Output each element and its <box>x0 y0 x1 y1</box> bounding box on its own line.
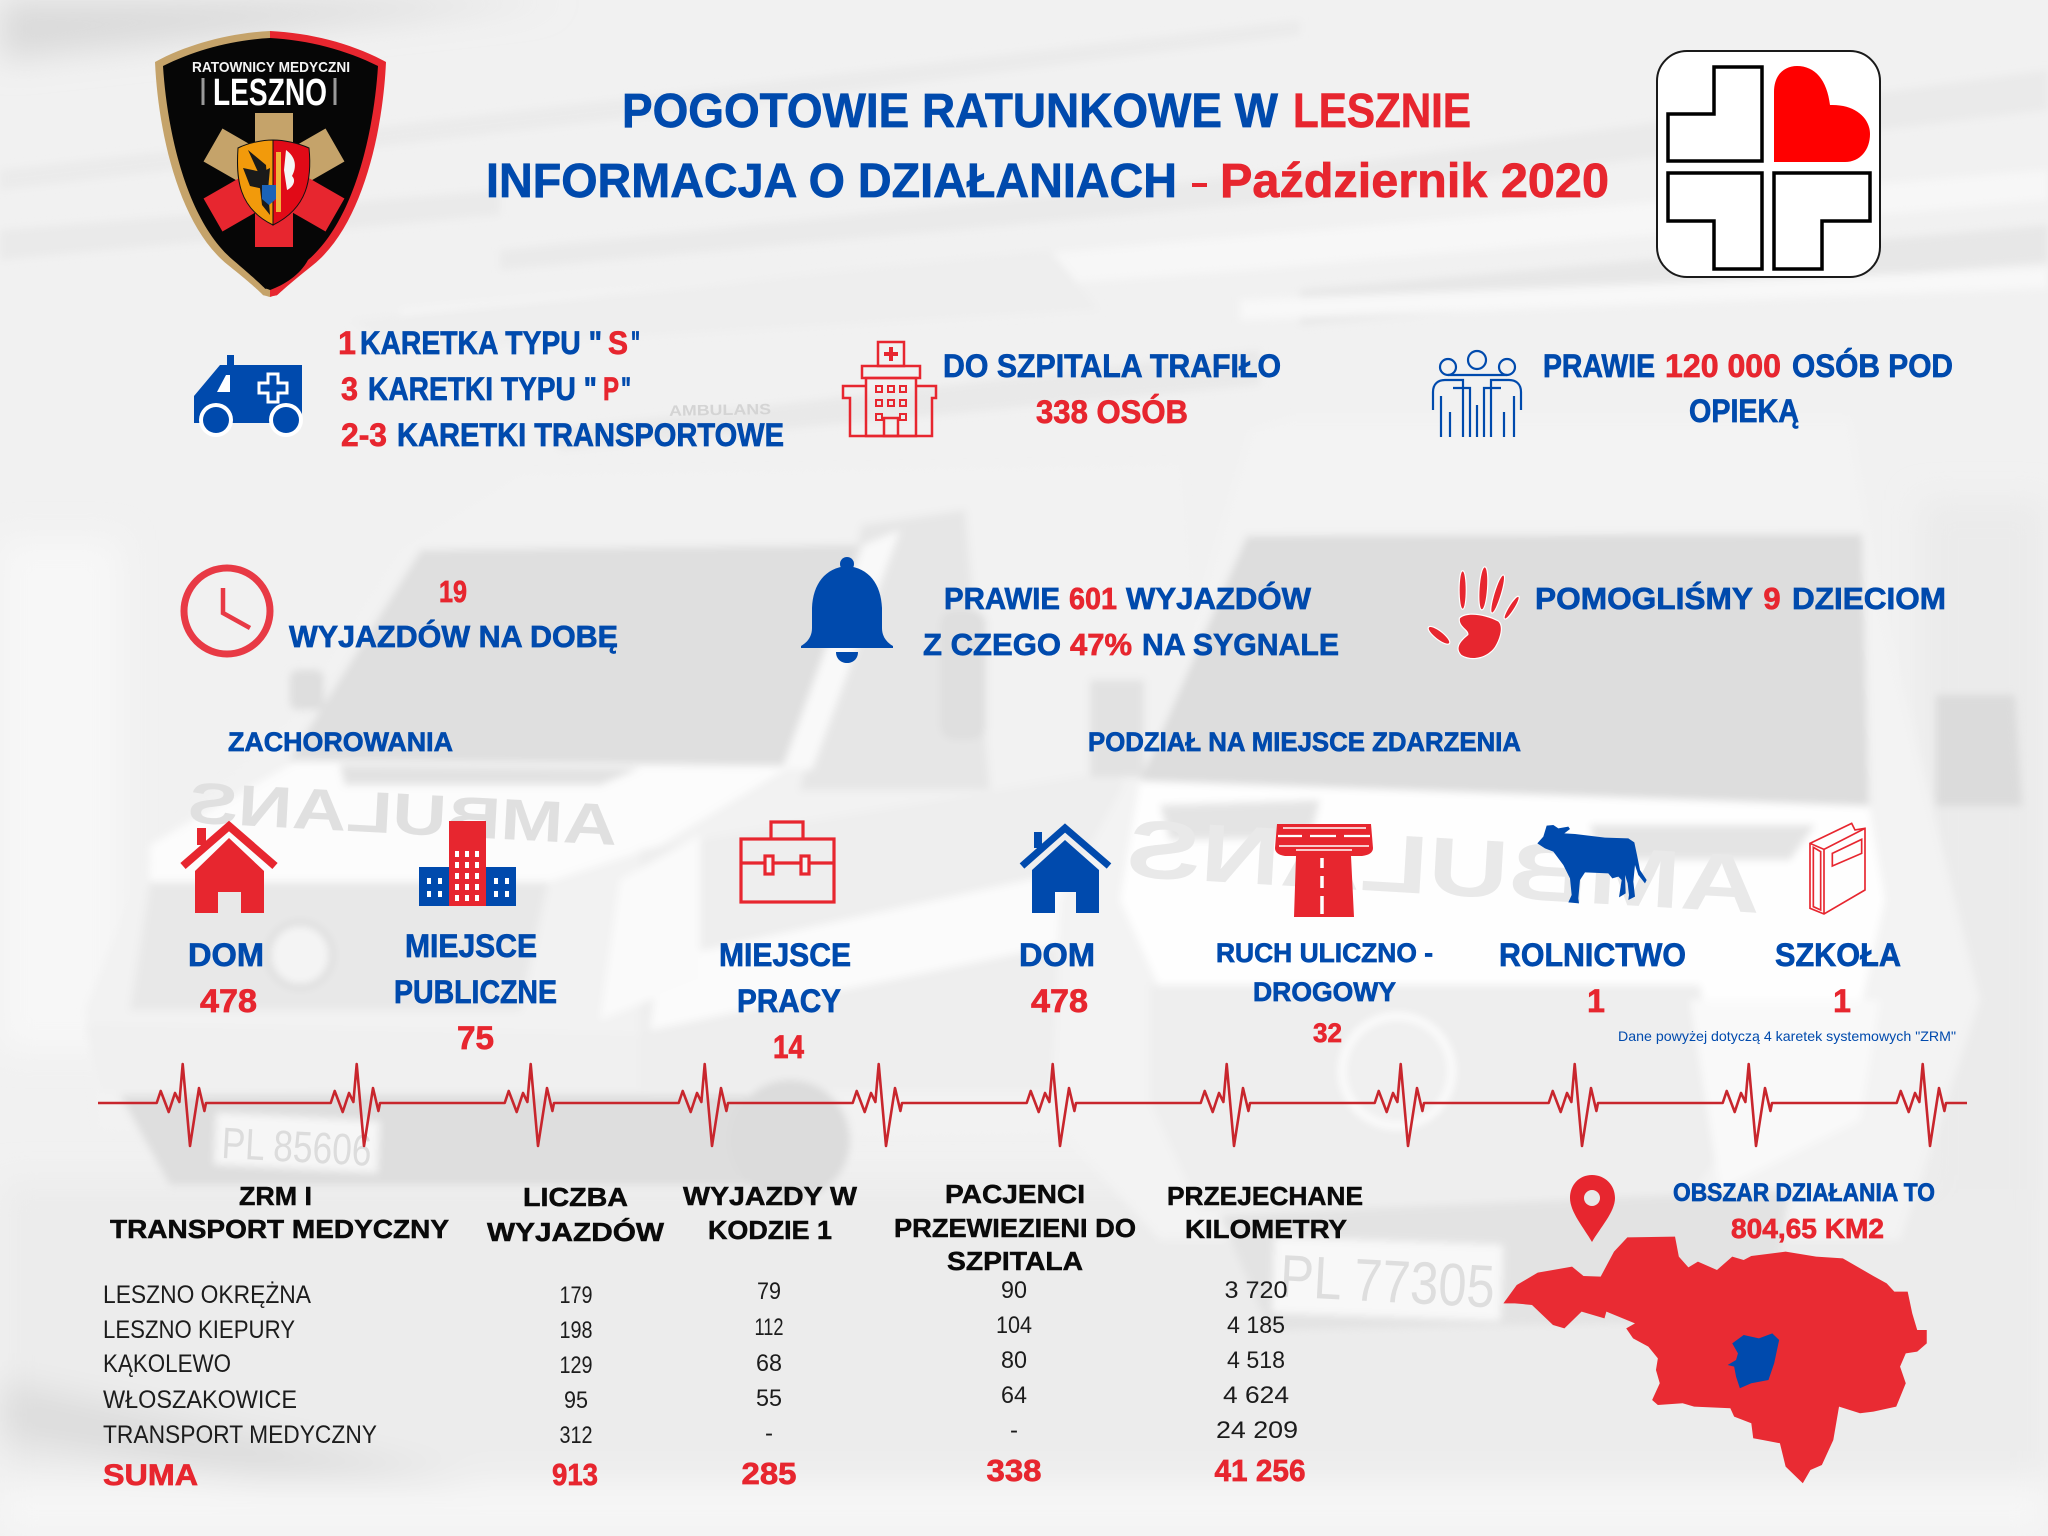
title: LESZNIE <box>1293 85 1471 138</box>
table row names: WŁOSZAKOWICE <box>103 1386 297 1414</box>
table values: wyjazdy w kodzie 1: 79 <box>757 1278 781 1305</box>
table values: liczba wyjazdów: 129 <box>560 1352 592 1379</box>
text: people under care: OSÓB POD <box>1792 348 1953 384</box>
text: total departures: 601 <box>1069 581 1117 616</box>
table values: pacjenci: 80 <box>1001 1347 1027 1374</box>
table header: PACJENCI <box>945 1179 1085 1209</box>
icon: map pin <box>1570 1175 1615 1242</box>
table row names <box>103 1280 377 1492</box>
table header: PRZEJECHANE <box>1167 1181 1363 1211</box>
table values: pacjenci: 64 <box>1001 1382 1027 1409</box>
stat: rolnictwo 1: ROLNICTWO <box>1499 937 1686 973</box>
stat: dom 478 <box>1019 937 1095 1019</box>
background: garage photo with two ambulances: AMBULANS <box>1124 803 1763 931</box>
map: Leszno district <box>1503 1237 1927 1483</box>
table values: liczba wyjazdów: 198 <box>560 1317 592 1344</box>
table values: kilometry <box>1214 1277 1306 1488</box>
stat: dom 478: 478 <box>200 983 257 1019</box>
table values: wyjazdy w kodzie 1: 112 <box>754 1314 784 1341</box>
stat: ruch uliczno-drogowy 32: 32 <box>1313 1018 1342 1048</box>
stat: rolnictwo 1 <box>1499 937 1686 1019</box>
table values: wyjazdy w kodzie 1 <box>742 1278 796 1491</box>
text: ambulance counts: 1 <box>338 325 356 361</box>
stat: miejsce publiczne 75: PUBLICZNE <box>394 974 557 1010</box>
logo: heart and cross <box>1657 51 1880 277</box>
logo: Ratownicy Medyczni Leszno shield: RATOWNICY MEDYCZNI <box>192 59 350 76</box>
text: total departures: PRAWIE <box>944 581 1060 616</box>
table values: kilometry: 4 624 <box>1223 1382 1289 1409</box>
icon: house red <box>183 826 275 913</box>
background: garage photo with two ambulances: AMBULANS <box>669 401 771 420</box>
text: daily departures: 19 <box>439 574 467 609</box>
text: people under care: OPIEKĄ <box>1689 393 1799 429</box>
heading: zachorowania: ZACHOROWANIA <box>228 727 453 757</box>
text: area: OBSZAR DZIAŁANIA TO <box>1673 1179 1935 1207</box>
stat: szkoła 1: 1 <box>1833 983 1851 1019</box>
title <box>486 85 1609 208</box>
table row names: LESZNO KIEPURY <box>103 1316 295 1344</box>
stat: miejsce pracy 14: 14 <box>773 1029 804 1065</box>
background: garage photo with two ambulances: PL 77305 <box>1278 1242 1497 1320</box>
text: children helped: DZIECIOM <box>1792 581 1946 616</box>
table values: liczba wyjazdów: 95 <box>564 1387 588 1414</box>
table values: kilometry: 3 720 <box>1224 1277 1288 1304</box>
text: area: 804,65 KM2 <box>1731 1213 1884 1244</box>
icon: house blue <box>1022 828 1109 913</box>
table values: pacjenci: - <box>1010 1417 1018 1444</box>
table values: kilometry: 24 209 <box>1216 1417 1298 1444</box>
stat: ruch uliczno-drogowy 32 <box>1216 938 1433 1048</box>
stat: miejsce publiczne 75: MIEJSCE <box>405 928 537 964</box>
table header: WYJAZDÓW <box>487 1217 665 1247</box>
table values: kilometry: 4 185 <box>1227 1312 1285 1339</box>
table header: KILOMETRY <box>1185 1214 1347 1244</box>
table values: kilometry: 4 518 <box>1227 1347 1285 1374</box>
table values: pacjenci: 90 <box>1001 1277 1027 1304</box>
table header: SZPITALA <box>947 1246 1083 1276</box>
icon: hand print <box>1427 567 1520 658</box>
left ambulance <box>85 465 1240 1140</box>
table values: wyjazdy w kodzie 1: 55 <box>756 1385 782 1412</box>
text: children helped: POMOGLIŚMY <box>1535 580 1753 616</box>
icon: people <box>1433 351 1521 437</box>
table values: pacjenci: 338 <box>986 1453 1042 1488</box>
text: daily departures: WYJAZDÓW NA DOBĘ <box>289 618 618 654</box>
icon: hospital <box>843 342 936 436</box>
table values: wyjazdy w kodzie 1: - <box>765 1420 773 1447</box>
text: ambulance counts: " <box>621 371 631 407</box>
stat: miejsce pracy 14 <box>719 937 851 1065</box>
icon: buildings <box>419 821 516 906</box>
right ambulance <box>1050 418 1980 1240</box>
table values: pacjenci: 104 <box>996 1312 1032 1339</box>
table header <box>110 1179 1363 1276</box>
table header: KODZIE 1 <box>708 1215 832 1245</box>
table header: TRANSPORT MEDYCZNY <box>110 1214 449 1244</box>
text: ambulance counts: " <box>631 325 640 361</box>
background: garage photo with two ambulances: AMBULANS <box>186 771 619 858</box>
text: total departures: Z CZEGO <box>923 627 1061 662</box>
text: people under care: 120 000 <box>1665 348 1781 384</box>
text: hospital admissions: 338 OSÓB <box>1036 394 1188 430</box>
table row names: KĄKOLEWO <box>103 1350 231 1378</box>
text: ambulance counts <box>338 325 784 453</box>
text: total departures: NA SYGNALE <box>1142 627 1339 662</box>
title: POGOTOWIE RATUNKOWE W <box>622 85 1279 138</box>
heading: podział na miejsce zdarzenia: PODZIAŁ NA MIEJSCE ZDARZENIA <box>1088 727 1521 757</box>
title: INFORMACJA O DZIAŁANIACH <box>486 155 1177 208</box>
stat: dom 478: DOM <box>188 937 264 973</box>
title: Październik 2020 <box>1220 155 1609 208</box>
table values: wyjazdy w kodzie 1: 285 <box>742 1456 796 1491</box>
table values: liczba wyjazdów: 179 <box>560 1282 592 1309</box>
icon: book <box>1810 823 1865 914</box>
text: total departures <box>923 580 1339 662</box>
text: total departures: 47% <box>1070 627 1132 662</box>
icon: ambulance <box>194 355 303 437</box>
stat: ruch uliczno-drogowy 32: RUCH ULICZNO - <box>1216 938 1433 968</box>
text: children helped <box>1535 580 1946 616</box>
stat: ruch uliczno-drogowy 32: DROGOWY <box>1253 977 1396 1007</box>
table header: PRZEWIEZIENI DO <box>894 1213 1136 1243</box>
table values: pacjenci <box>986 1277 1042 1488</box>
text: children helped: 9 <box>1763 581 1781 616</box>
table row names: LESZNO OKRĘŻNA <box>103 1280 311 1309</box>
table header: ZRM I <box>239 1181 312 1211</box>
table values: liczba wyjazdów: 312 <box>560 1422 592 1449</box>
text: ambulance counts: KARETKA TYPU " <box>360 325 602 361</box>
table row names: SUMA <box>103 1459 198 1492</box>
text: area <box>1673 1179 1935 1244</box>
table values: wyjazdy w kodzie 1: 68 <box>756 1350 782 1377</box>
stat: szkoła 1 <box>1775 937 1901 1019</box>
text: ambulance counts: 3 <box>341 371 358 407</box>
text: hospital admissions <box>943 348 1281 430</box>
background: garage photo with two ambulances: PL 85606 <box>220 1119 373 1176</box>
table row names: TRANSPORT MEDYCZNY <box>103 1421 377 1449</box>
icon: clock <box>184 568 270 654</box>
stat: rolnictwo 1: 1 <box>1587 983 1605 1019</box>
text: ambulance counts: S <box>608 325 628 361</box>
icon: road <box>1275 824 1373 917</box>
stat: szkoła 1: SZKOŁA <box>1775 937 1901 973</box>
text: hospital admissions: DO SZPITALA TRAFIŁO <box>943 348 1281 384</box>
text: people under care <box>1543 348 1953 429</box>
table values: liczba wyjazdów <box>552 1282 598 1492</box>
icon: briefcase <box>741 822 834 902</box>
table: departures by unit <box>103 1179 1363 1492</box>
icon: bell <box>801 557 893 663</box>
stat: dom 478: 478 <box>1031 983 1088 1019</box>
text: people under care: PRAWIE <box>1543 348 1655 384</box>
text: ambulance counts: P <box>603 371 619 407</box>
text: total departures: WYJAZDÓW <box>1126 580 1312 616</box>
text: ambulance counts: KARETKI TRANSPORTOWE <box>397 417 784 453</box>
icon: cow <box>1537 825 1647 903</box>
text: daily departures <box>289 574 618 654</box>
table header: LICZBA <box>523 1182 628 1212</box>
table values: liczba wyjazdów: 913 <box>552 1457 598 1492</box>
stat: dom 478: DOM <box>1019 937 1095 973</box>
note: ZRM data: Dane powyżej dotyczą 4 karetek systemowych "ZRM" <box>1618 1028 1956 1044</box>
text: ambulance counts: 2-3 <box>341 417 387 453</box>
stat: miejsce publiczne 75 <box>394 928 557 1056</box>
logo: Ratownicy Medyczni Leszno shield <box>155 31 386 297</box>
stat: miejsce publiczne 75: 75 <box>457 1020 494 1056</box>
stat: miejsce pracy 14: MIEJSCE <box>719 937 851 973</box>
stat: miejsce pracy 14: PRACY <box>737 983 841 1019</box>
ECG line <box>98 1064 1967 1146</box>
logo: Ratownicy Medyczni Leszno shield: LESZNO <box>213 72 327 114</box>
stat: dom 478 <box>188 937 264 1019</box>
table values: kilometry: 41 256 <box>1214 1453 1306 1488</box>
text: ambulance counts: KARETKI TYPU " <box>368 371 597 407</box>
table header: WYJAZDY W <box>683 1181 857 1211</box>
